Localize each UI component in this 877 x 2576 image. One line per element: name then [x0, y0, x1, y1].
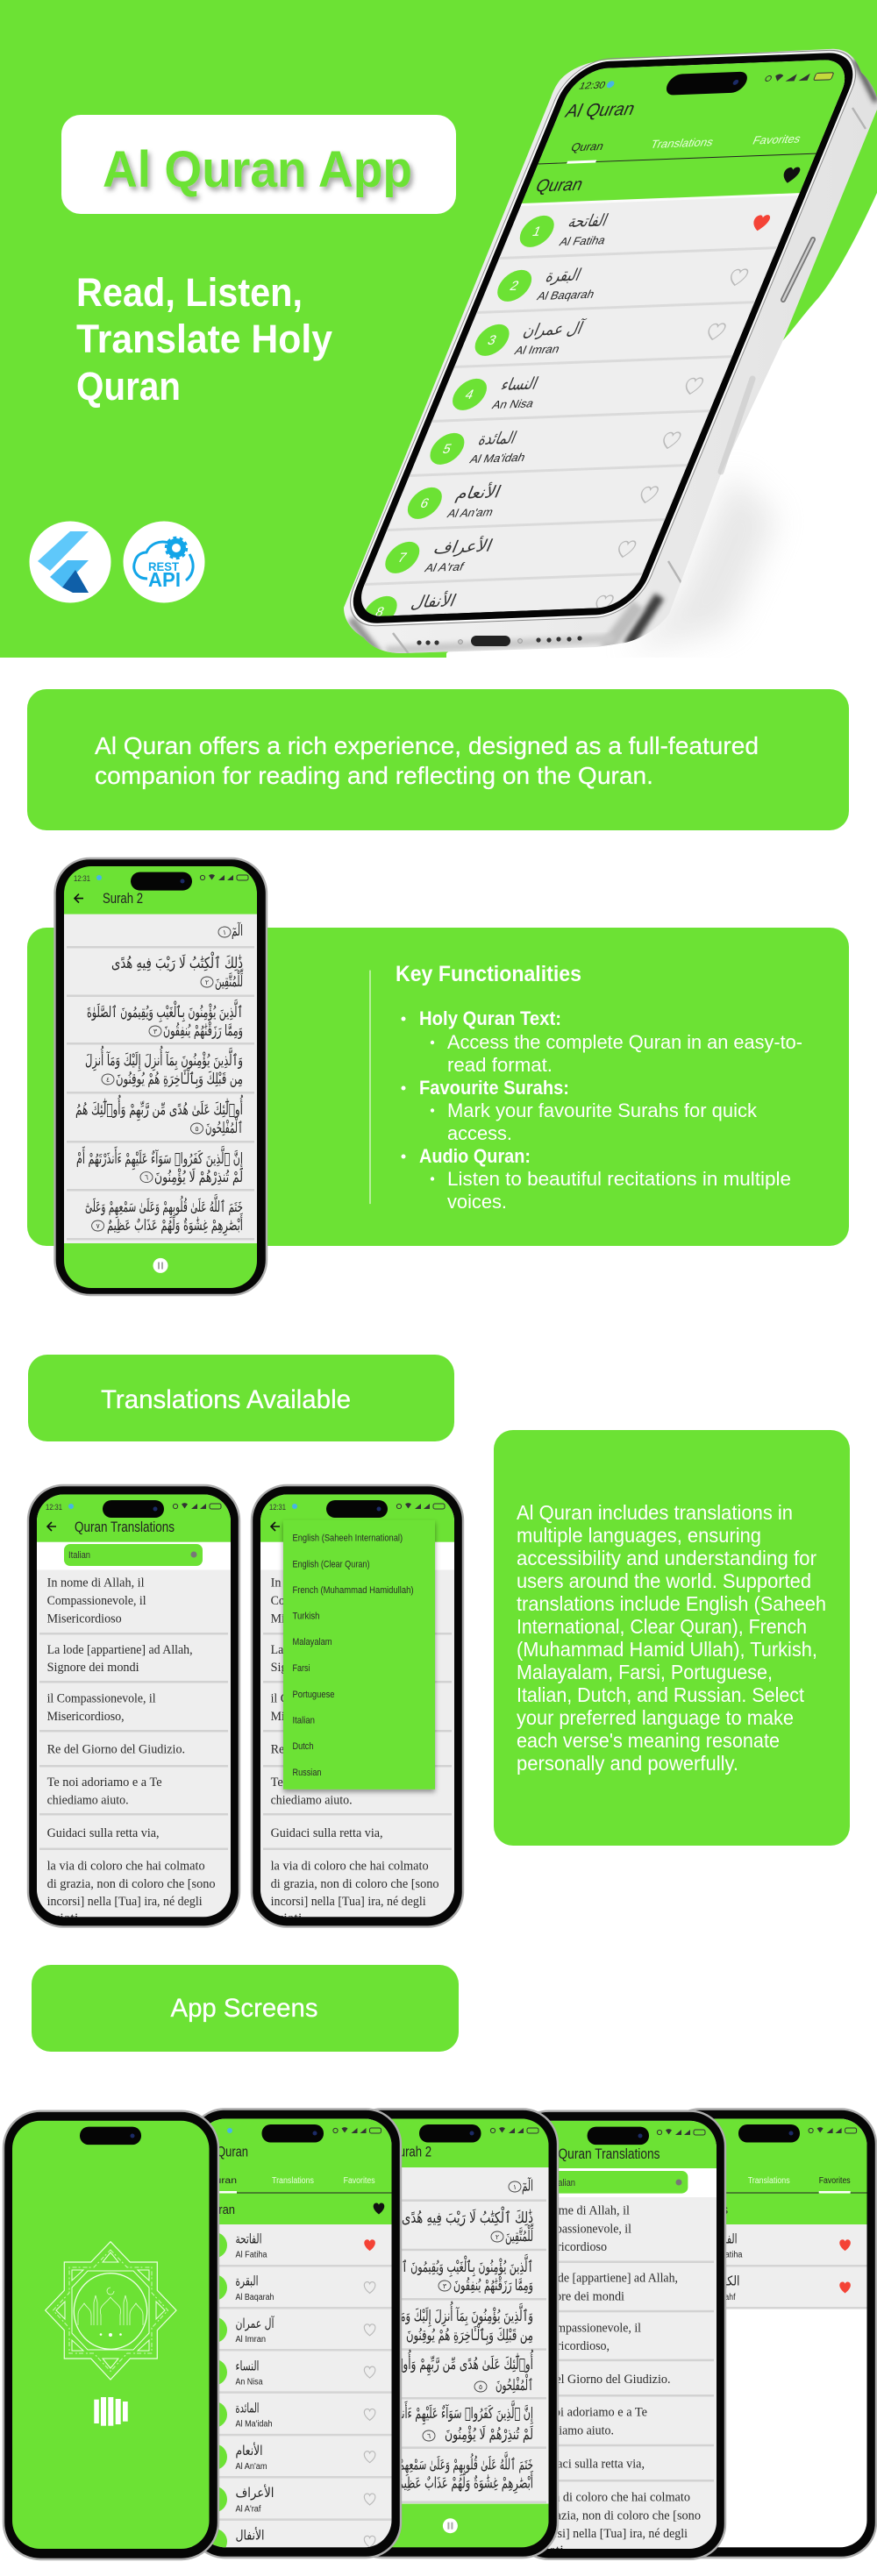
phone: quran list screen: الأنعام: [235, 2442, 263, 2459]
surah rows: Al An'am: [446, 506, 496, 520]
phone: surah screen: خَتَمَ ٱللَّهُ عَلَىٰ قُلُوبِهِمْ وَعَلَىٰ سَمْعِهِمْ وَعَلَىٰٓ: [375, 2451, 533, 2477]
panel: translations description: Italian, Dutch, and Russian. Select: [517, 1683, 805, 1706]
phone: favorites screen: الكهف: [710, 2274, 740, 2289]
phone: quran list screen: An Nisa: [235, 2377, 263, 2387]
language menu: Dutch: [293, 1741, 314, 1752]
surah rows: [364, 213, 778, 616]
panel: translations description: personally and powerfully.: [517, 1752, 738, 1775]
surah rows: الأنفال: [409, 590, 460, 612]
surah rows: 5: [440, 442, 453, 457]
surah rows: الأعراف: [431, 535, 496, 558]
quran verses: أَبْصَٰرِهِمْ غِشَٰوَةٌ وَلَهُمْ عَذَابٌ عَظِيمٌ: [107, 1213, 243, 1236]
surah rows: 1: [530, 224, 544, 239]
tagline: Read, Listen,: [76, 270, 303, 315]
phone: language menu open: In nome di Allah, il: [271, 1576, 368, 1590]
feature list: access.: [447, 1122, 512, 1144]
language menu: Russian: [293, 1768, 321, 1778]
phone: surah screen: أُو۟لَٰٓئِكَ عَلَىٰ هُدًى مِّن رَّبِّهِمْ وَأُو۟لَٰٓئِكَ هُمُ: [366, 2350, 533, 2376]
app bar: Surah 2: [103, 890, 143, 907]
feature list: [402, 1007, 802, 1213]
feature list: Access the complete Quran in an easy-to-: [447, 1031, 802, 1053]
phone: language menu open: Misericordioso,: [271, 1710, 348, 1724]
phone: language menu open: il Compassionevole, il: [271, 1692, 380, 1706]
phone: language menu open: Te noi adoriamo e a Te: [271, 1775, 386, 1790]
icon: black heart: [784, 167, 800, 183]
verse markers: ٥: [479, 2383, 482, 2391]
translation text: di grazia, non di coloro che [sono: [47, 1877, 216, 1891]
tagline: [76, 270, 332, 409]
phone: surah screen: لِّلْمُتَّقِينَ: [505, 2222, 533, 2245]
phone: favorites screen: Favorites: [819, 2176, 851, 2186]
phone: language menu open: Compassionevole, il: [271, 1594, 370, 1608]
quran verses: لِّلْمُتَّقِينَ: [215, 967, 243, 991]
surah rows: البقرة: [543, 265, 584, 286]
surah rows: Al Ma'idah: [468, 451, 527, 466]
verse markers: ٣: [443, 2282, 447, 2290]
verse markers: ٢: [205, 978, 209, 986]
surah rows: Al A'raf: [423, 560, 467, 574]
quran verses: خَتَمَ ٱللَّهُ عَلَىٰ قُلُوبِهِمْ وَعَلَىٰ سَمْعِهِمْ وَعَلَىٰٓ: [85, 1193, 243, 1219]
hero section: [0, 0, 877, 658]
phone: language menu open: La lode [appartiene] ad Allah,: [271, 1643, 417, 1657]
surah rows: الفاتحة: [566, 210, 611, 231]
verse markers: [92, 927, 231, 1231]
phone: translations screen: Re del Giorno del Giudizio.: [532, 2373, 670, 2387]
quran verses: مِن قَبْلِكَ وَبِٱلْـَٔاخِرَةِ هُمْ يُوقِنُونَ: [116, 1067, 243, 1089]
status bar: 12:30: [577, 81, 607, 91]
surah rows: النساء: [498, 374, 541, 395]
verse markers: ٦: [427, 2432, 431, 2440]
phone: surah screen: ٱلَّذِينَ يُؤْمِنُونَ بِٱلْغَيْبِ وَيُقِيمُونَ ٱلصَّلَوٰةَ: [377, 2253, 533, 2277]
icon: REST API logo: REST: [148, 559, 179, 573]
translation text: Guidaci sulla retta via,: [47, 1826, 160, 1840]
language menu: French (Muhammad Hamidullah): [293, 1585, 414, 1596]
surah rows: المائدة: [475, 428, 520, 449]
translation text: sviati.: [47, 1911, 82, 1925]
phone: language menu open: di grazia, non di coloro che [sono: [271, 1877, 439, 1891]
phone: translations screen: Te noi adoriamo e a Te: [532, 2406, 647, 2420]
icon: REST API logo: [123, 521, 205, 603]
phone: surah reader: [54, 858, 267, 1295]
feature list: Audio Quran:: [419, 1145, 531, 1167]
panel: translations description: each verse's meaning resonate: [517, 1729, 780, 1752]
translation text: il Compassionevole, il: [47, 1692, 156, 1706]
phone: language menu open: la via di coloro che hai colmato: [271, 1859, 429, 1873]
feature list: Listen to beautiful recitations in multiple: [447, 1168, 791, 1190]
phone: language menu open: [252, 1485, 463, 1927]
language menu: English (Saheeh International): [293, 1533, 403, 1543]
phone: language menu open: Signore dei mondi: [271, 1661, 363, 1675]
surah rows: الأنعام: [453, 481, 504, 503]
phone: quran list screen: الأعراف: [235, 2484, 274, 2501]
phone: quran list screen: النساء: [235, 2358, 260, 2373]
phone: translations screen: Misericordioso: [532, 2240, 607, 2254]
panel: translations description: International, Clear Quran), French: [517, 1615, 807, 1638]
phone: quran list screen: Al An'am: [235, 2462, 267, 2472]
panel: translations description: [494, 1430, 850, 1846]
feature list: Holy Quran Text:: [419, 1007, 561, 1029]
icon: pause button: [443, 2518, 458, 2533]
status bar: [579, 72, 834, 95]
quran verses: إِنَّ ٱلَّذِينَ كَفَرُوا۟ سَوَآءٌ عَلَيْهِمْ ءَأَنذَرْتَهُمْ أَمْ: [76, 1145, 243, 1171]
phone: quran list screen: آل عمران: [235, 2316, 275, 2331]
phone: language menu open: Re del Giorno del Giudizio.: [271, 1743, 409, 1757]
panel: translations description: Al Quran includes translations in: [517, 1501, 793, 1524]
verse markers: ٢: [496, 2233, 499, 2241]
panel: translations description: your preferred language to make: [517, 1706, 794, 1729]
phone: quran list screen: الفاتحة: [235, 2231, 261, 2246]
phone: translations screen: Misericordioso,: [532, 2339, 610, 2353]
translation text: In nome di Allah, il: [47, 1576, 145, 1590]
feature list: Mark your favourite Surahs for quick: [447, 1099, 758, 1121]
translation text: Te noi adoriamo e a Te: [47, 1775, 162, 1790]
phone: translations list: [28, 1485, 239, 1927]
language menu: Portuguese: [293, 1690, 335, 1700]
icon: pause button: [153, 1258, 168, 1273]
translation text: La lode [appartiene] ad Allah,: [47, 1643, 193, 1657]
surah rows: 6: [418, 496, 431, 511]
phone: translations screen: Compassionevole, il: [532, 2222, 631, 2236]
language dropdown: Italian: [68, 1550, 90, 1561]
panel: intro: [27, 689, 849, 830]
panel: translations heading: Translations Available: [101, 1385, 351, 1414]
surah rows: 7: [396, 551, 409, 566]
phone: quran list screen: البقرة: [235, 2274, 258, 2289]
panel: translations description: (Muhammad Hamid Ullah), Turkish,: [517, 1638, 817, 1661]
panel: translations heading: [28, 1355, 454, 1441]
phone: quran list screen: Al Fatiha: [235, 2250, 267, 2260]
phone: favorites screen: Favorites: [679, 2202, 728, 2217]
phone: language menu open: Misericordioso: [271, 1612, 346, 1626]
phone: favorites screen: Translations: [748, 2176, 790, 2186]
surah rows: Al Fatiha: [558, 234, 608, 248]
quran verses: ٱلْمُفْلِحُونَ: [205, 1116, 243, 1137]
phone: quran list screen: الأنفال: [235, 2527, 265, 2543]
phone: language menu open: 12:31: [269, 1503, 286, 1512]
phone: translations screen: il Compassionevole, il: [532, 2322, 641, 2336]
bottom port and speakers: [417, 636, 582, 646]
panel: translations description: accessibility and understanding for: [517, 1547, 816, 1569]
translation text: la via di coloro che hai colmato: [47, 1859, 205, 1873]
translation text: Misericordioso: [47, 1612, 122, 1626]
translation text: incorsi] nella [Tua] ira, né degli: [47, 1895, 203, 1909]
surah rows: Al Baqarah: [535, 288, 596, 302]
translation text: Misericordioso,: [47, 1710, 125, 1724]
surah rows: 3: [485, 333, 498, 348]
panel: translations description: Malayalam, Farsi, Portuguese,: [517, 1661, 773, 1683]
translation text: chiediamo aiuto.: [47, 1794, 129, 1808]
phone: surah screen: الٓمٓ: [522, 2176, 533, 2195]
phone: quran list screen: Quran: [207, 2176, 237, 2186]
panel: translations description: users around the world. Supported: [517, 1569, 811, 1592]
language menu: Italian: [293, 1715, 315, 1726]
phone: quran list screen: Translations: [272, 2176, 314, 2186]
quran verses: ذَٰلِكَ ٱلْكِتَٰبُ لَا رَيْبَ فِيهِ هُدًى: [111, 951, 243, 972]
phone: language menu open: sviati.: [271, 1911, 306, 1925]
icon: REST API logo: API: [148, 568, 181, 591]
surah rows: Al Imran: [513, 343, 562, 357]
language menu: [283, 1520, 435, 1790]
phone: quran list screen: Al Ma'idah: [235, 2420, 272, 2430]
panel: intro: Al Quran offers a rich experience, designed as a full-featured: [95, 732, 759, 759]
phone: translations screen: incorsi] nella [Tua] ira, né degli: [532, 2527, 688, 2541]
quran verses: [75, 921, 243, 1236]
tabs: Quran: [569, 139, 606, 153]
phone: surah screen: لَمْ تُنذِرْهُمْ لَا يُؤْمِنُونَ: [445, 2424, 533, 2444]
phone: translations screen: In nome di Allah, il: [532, 2204, 630, 2218]
phone: surah screen: ٱلْمُفْلِحُونَ: [496, 2373, 533, 2395]
phone: translations screen: Quran Translations: [558, 2145, 660, 2162]
panel: app screens heading: App Screens: [170, 1994, 317, 2023]
phone: surah screen: مِن قَبْلِكَ وَبِٱلْـَٔاخِرَةِ هُمْ يُوقِنُونَ: [406, 2323, 533, 2345]
tagline: Translate Holy: [76, 317, 332, 361]
phone: surah screen: أَبْصَٰرِهِمْ غِشَٰوَةٌ وَلَهُمْ عَذَابٌ عَظِيمٌ: [397, 2470, 533, 2494]
phone: translations screen: chiediamo aiuto.: [532, 2423, 614, 2437]
list header: Quran: [532, 174, 586, 196]
heading: Key Functionalities: [396, 962, 581, 986]
phone: translations screen: [514, 2111, 725, 2559]
surah rows: 2: [508, 279, 521, 294]
phone: translations screen: sviati.: [532, 2544, 567, 2558]
phone: surah screen: إِنَّ ٱلَّذِينَ كَفَرُوا۟ سَوَآءٌ عَلَيْهِمْ ءَأَنذَرْتَهُمْ أَمْ: [367, 2400, 533, 2425]
panel: intro: companion for reading and reflecting on the Quran.: [95, 762, 653, 789]
phone: language menu open: incorsi] nella [Tua] ira, né degli: [271, 1895, 426, 1909]
quran verses: أُو۟لَٰٓئِكَ عَلَىٰ هُدًى مِّن رَّبِّهِمْ وَأُو۟لَٰٓئِكَ هُمُ: [75, 1095, 243, 1121]
status bar: [74, 872, 248, 891]
surah rows: An Nisa: [490, 397, 536, 411]
panel: translations description: multiple languages, ensuring: [517, 1524, 761, 1547]
phone: translations screen: Guidaci sulla retta via,: [532, 2457, 645, 2471]
phone: quran list screen: المائدة: [235, 2401, 260, 2416]
surah rows: آل عمران: [521, 317, 588, 340]
tabs: Translations: [649, 136, 716, 151]
phone: surah screen: [374, 2108, 560, 2558]
feature list: read format.: [447, 1054, 553, 1076]
phone: translations screen: Signore dei mondi: [532, 2289, 624, 2303]
phone: translations screen: di grazia, non di coloro che [sono: [532, 2509, 701, 2523]
phone: splash screen: [4, 2111, 218, 2559]
translation text: [47, 1576, 216, 1925]
language menu: Farsi: [293, 1663, 310, 1674]
phone: quran list screen: [189, 2110, 401, 2558]
quran verses: الٓمٓ: [232, 921, 243, 940]
translation text: Re del Giorno del Giudizio.: [47, 1743, 185, 1757]
verse markers: ٤: [106, 1076, 110, 1084]
surah rows: 4: [463, 388, 476, 402]
verse markers: ١: [513, 2183, 517, 2191]
verse markers: ٦: [145, 1174, 148, 1182]
phone: translations list: Quran Translations: [75, 1519, 175, 1535]
phone: surah screen: ذَٰلِكَ ٱلْكِتَٰبُ لَا رَيْبَ فِيهِ هُدًى: [402, 2206, 533, 2227]
status bar: 12:31: [74, 874, 90, 883]
icon: app logo bars: [94, 2397, 128, 2426]
phone: quran list screen: Favorites: [344, 2176, 375, 2186]
app bar title: Al Quran: [562, 98, 638, 121]
phone: translations screen: Italian: [553, 2178, 575, 2188]
quran verses: لَمْ تُنذِرْهُمْ لَا يُؤْمِنُونَ: [154, 1167, 243, 1186]
verse markers: ١: [223, 929, 226, 936]
quran verses: ٱلَّذِينَ يُؤْمِنُونَ بِٱلْغَيْبِ وَيُقِيمُونَ ٱلصَّلَوٰةَ: [87, 999, 243, 1022]
panel: key functionalities: [27, 928, 849, 1246]
app bar: [74, 893, 142, 903]
title card: [61, 115, 456, 214]
phone: surah screen: Surah 2: [391, 2143, 431, 2160]
language menu: Malayalam: [293, 1637, 332, 1647]
phone: translations screen: la via di coloro che hai colmato: [532, 2490, 690, 2504]
quran verses: وَمِمَّا رَزَقْنَٰهُمْ يُنفِقُونَ: [163, 1021, 243, 1040]
phone: language menu open: chiediamo aiuto.: [271, 1794, 353, 1808]
icon: flutter logo: [30, 521, 111, 603]
panel: app screens heading: [32, 1965, 459, 2052]
phone: quran list screen: Quran: [203, 2202, 235, 2217]
verse markers: ٥: [195, 1125, 199, 1133]
phone: favorites screen: الفاتحة: [710, 2231, 737, 2246]
language menu: English (Clear Quran): [293, 1559, 370, 1569]
phone: quran list screen: Al A'raf: [235, 2504, 261, 2514]
phone: favorites screen: [688, 2108, 877, 2558]
quran verses: وَٱلَّذِينَ يُؤْمِنُونَ بِمَآ أُنزِلَ إِلَيْكَ وَمَآ أُنزِلَ: [85, 1046, 243, 1072]
tabs: [538, 135, 816, 165]
phone: surah screen: وَٱلَّذِينَ يُؤْمِنُونَ بِمَآ أُنزِلَ إِلَيْكَ وَمَآ أُنزِلَ: [375, 2302, 533, 2328]
phone: translations screen: La lode [appartiene] ad Allah,: [532, 2271, 678, 2285]
translation text: Compassionevole, il: [47, 1594, 146, 1608]
verse markers: ٧: [96, 1222, 100, 1230]
verse markers: ٣: [153, 1028, 158, 1035]
feature list: Favourite Surahs:: [419, 1077, 569, 1099]
surah rows: 8: [373, 605, 387, 620]
phone: translations list: 12:31: [46, 1503, 62, 1512]
hero phone: [337, 49, 877, 655]
phone: quran list screen: Al Imran: [235, 2335, 266, 2345]
language dropdown: [64, 1544, 203, 1566]
phone: favorites screen: Al Kahf: [710, 2293, 736, 2302]
feature list: voices.: [447, 1191, 507, 1213]
tabs: Favorites: [751, 132, 803, 146]
phone: language menu open: Guidaci sulla retta via,: [271, 1826, 383, 1840]
translation text: Signore dei mondi: [47, 1661, 139, 1675]
phone: quran list screen: Al Baqarah: [235, 2293, 274, 2302]
tagline: Quran: [76, 364, 181, 409]
phone: quran list screen: Al Quran: [203, 2143, 248, 2160]
panel: translations description: translations include English (Saheeh: [517, 1592, 826, 1615]
phone: surah screen: وَمِمَّا رَزَقْنَٰهُمْ يُنفِقُونَ: [453, 2276, 533, 2295]
verse markers: [423, 2181, 521, 2441]
language menu: Turkish: [293, 1612, 319, 1622]
icon: mosque emblem: [46, 2242, 176, 2380]
title card: Al Quran App: [103, 141, 412, 198]
phone: favorites screen: Al Fatiha: [710, 2250, 743, 2260]
